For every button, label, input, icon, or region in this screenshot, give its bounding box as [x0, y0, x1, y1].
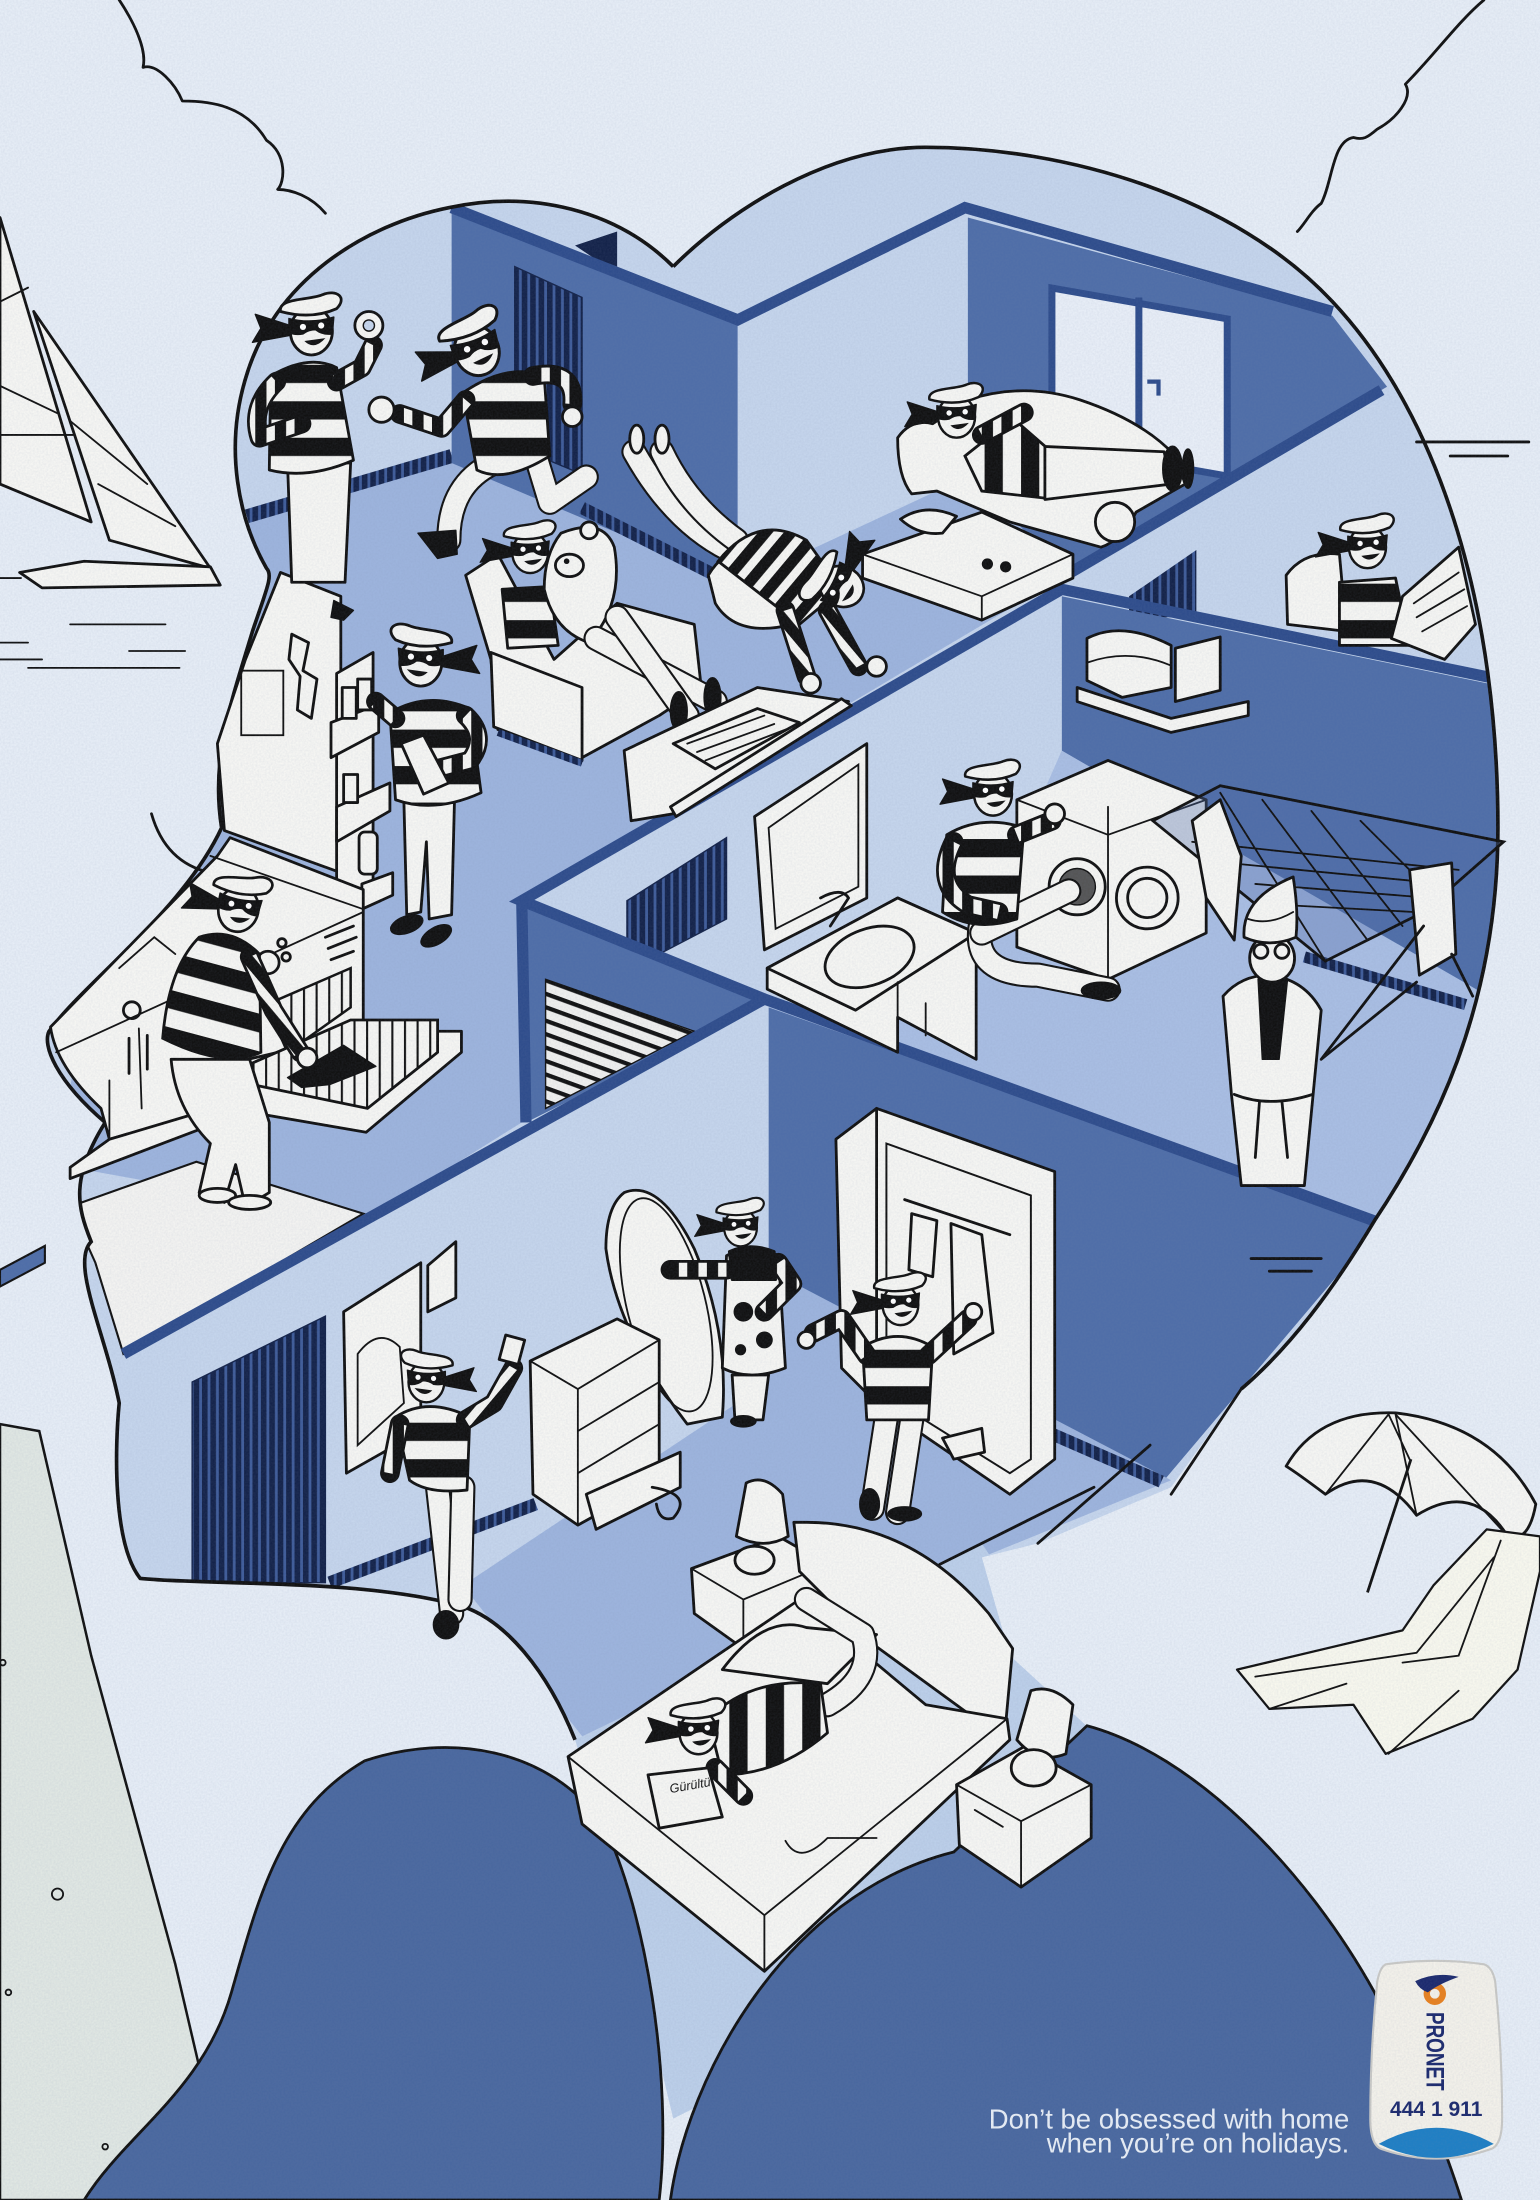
laundry room floor [769, 751, 1508, 1223]
lower dish rack [238, 1020, 438, 1108]
burglar at the dishwasher [163, 862, 317, 1209]
bed with burglar reading [568, 1522, 1013, 1971]
door behind wall top [575, 232, 617, 267]
skirting: living room left [247, 456, 452, 516]
dark shoulder right [670, 1726, 1461, 2200]
bedroom dark wall [769, 1007, 1382, 1480]
grey-green towel panel on the left [0, 1424, 224, 2200]
right light wall [738, 213, 968, 584]
right living room dark wall [968, 217, 1403, 575]
tagline: when you’re on holidays. [1046, 2127, 1349, 2158]
bedroom door [192, 1316, 325, 1583]
living room door [515, 267, 582, 474]
room with newspaper reader: light wall [1062, 386, 1515, 688]
burglar at the washing machine [940, 760, 1206, 999]
skirting: bedroom right [1052, 1434, 1161, 1482]
skirting: laundry right [1304, 957, 1466, 1005]
framed picture [344, 1242, 456, 1473]
shelf with towels [1077, 631, 1248, 732]
clouds [119, 0, 1484, 232]
bedside table with lamp, left [691, 1480, 828, 1649]
door strip by the divider [1129, 550, 1196, 617]
bedside table with lamp, right [957, 1689, 1091, 1887]
bathroom mirror [755, 744, 867, 950]
coffee table [863, 510, 1073, 620]
fridge [217, 572, 393, 912]
woman in bathrobe [1223, 877, 1321, 1186]
hall doorway [546, 979, 694, 1108]
loose sketch lines [0, 442, 1529, 1564]
brand name: PRONET [1420, 2012, 1448, 2091]
wardrobe [836, 1108, 1055, 1494]
blue lens [1379, 2128, 1494, 2158]
dishwasher door [230, 1031, 461, 1132]
laundry room dark wall [1062, 596, 1508, 1010]
bedroom light wall [98, 1005, 769, 1592]
living room floor [70, 452, 1024, 1214]
upper dish rack [266, 968, 351, 1052]
armchair with burglar and teddy bear [466, 520, 721, 763]
desk with keyboard [624, 688, 851, 821]
kitchen floor white band [70, 1111, 210, 1179]
phone number: 444 1 911 [1390, 2098, 1483, 2121]
chest of drawers [530, 1319, 680, 1529]
dark living room wall [452, 208, 738, 584]
burglar in dress at the mirror [602, 1189, 792, 1427]
dark shoulder left [84, 1748, 663, 2200]
sailboat outside the head [0, 217, 220, 668]
laundry door [627, 838, 727, 971]
reading burglar on chair [1286, 514, 1475, 659]
kitchen counter with dishwasher [50, 838, 461, 1179]
head and heart outline [47, 147, 1498, 1740]
window [1052, 288, 1227, 476]
laundry room light wall [547, 592, 1062, 999]
drying rack with clothes [1153, 786, 1504, 1059]
tagline: Don’t be obsessed with home [989, 2103, 1349, 2134]
bed with burglar reading: Gürültü [669, 1775, 712, 1796]
wall top trims [123, 208, 1498, 1354]
logo eye [1415, 1975, 1459, 2005]
neck area [575, 1543, 1108, 2119]
hall dark wall [522, 905, 764, 1122]
tagline [989, 2103, 1349, 2158]
burglar at wardrobe [798, 1272, 982, 1521]
selfie burglar [390, 1335, 525, 1639]
skirting: dark wall [582, 508, 715, 575]
skirting: bedroom [330, 1504, 536, 1583]
beach umbrella [1286, 1413, 1536, 1592]
bedroom floor [463, 1270, 1171, 1754]
sun lounger [1237, 1529, 1540, 1754]
running burglar [369, 303, 586, 558]
sink cabinet [767, 892, 976, 1059]
sofa with lying burglar [898, 383, 1194, 547]
kitchen floor [70, 1162, 363, 1354]
burglar at the fridge [376, 624, 481, 952]
pronet alarm box [1370, 1961, 1502, 2159]
burglar with donut [252, 293, 383, 620]
burglar falling on the beanbag [630, 425, 886, 693]
